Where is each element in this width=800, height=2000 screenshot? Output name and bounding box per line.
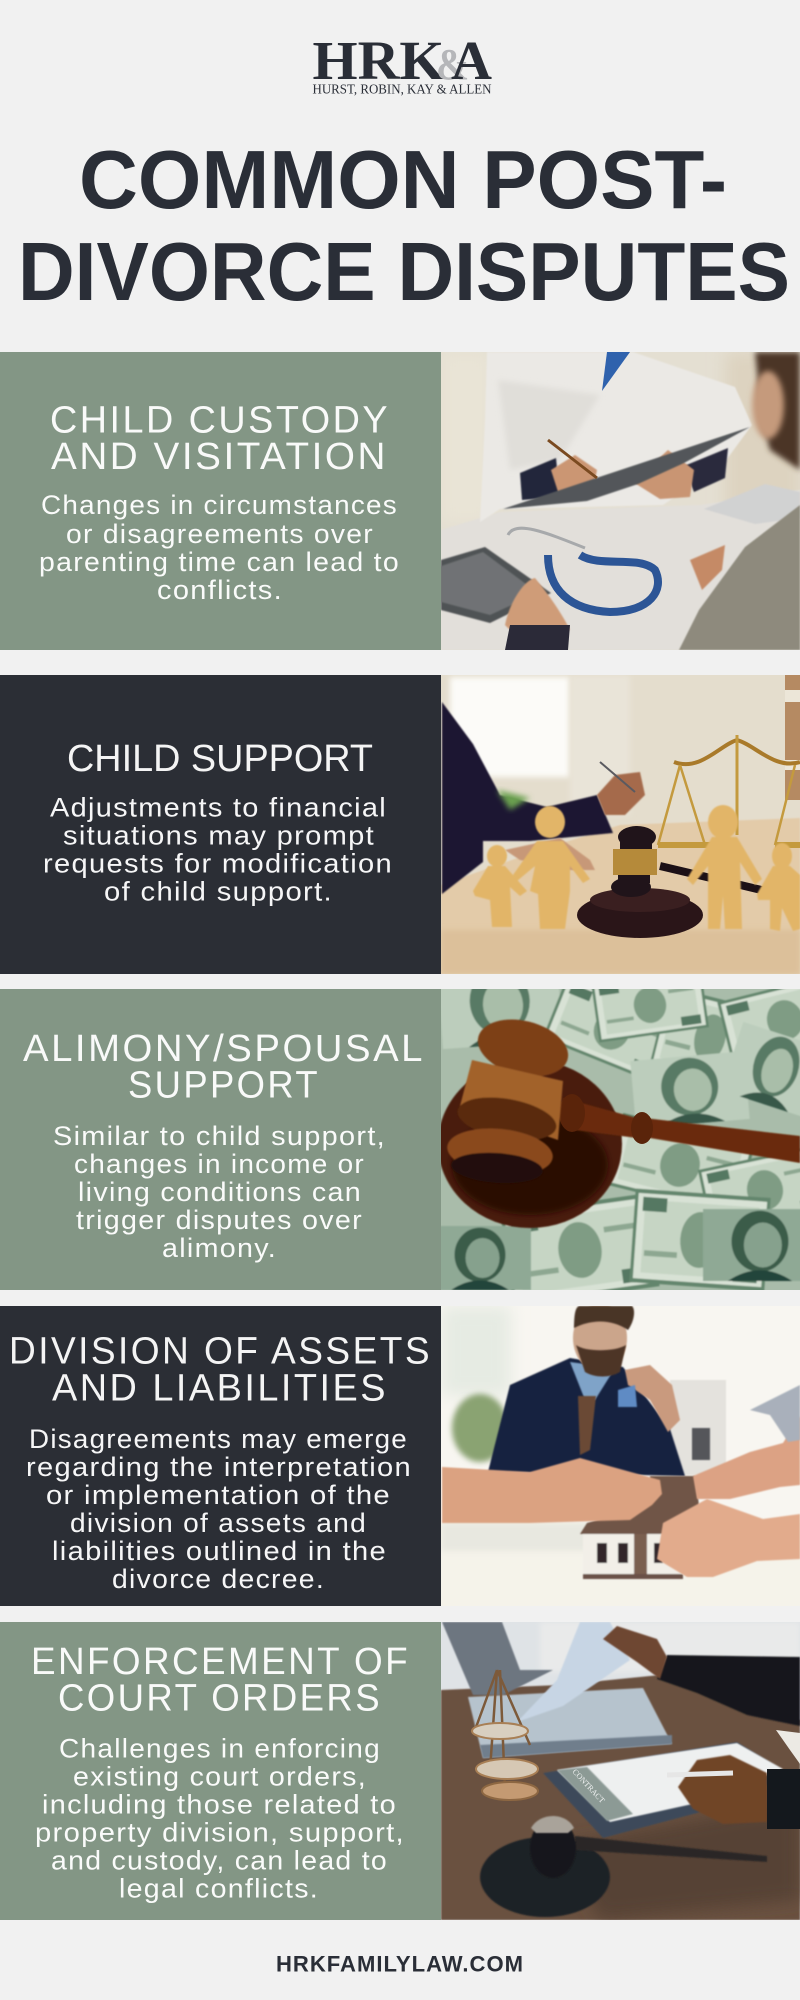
text: enforcement description: existing court orders, bbox=[73, 1762, 367, 1792]
clipboard and contract bbox=[543, 1742, 790, 1838]
text: child custody description: parenting time can lead to bbox=[39, 547, 400, 577]
panel: division of assets and liabilities bbox=[0, 1306, 441, 1606]
title: COMMON POST- bbox=[79, 133, 727, 226]
photo: doctor consultation bbox=[441, 352, 800, 650]
text: alimony description: trigger disputes over bbox=[76, 1205, 363, 1235]
text: division description: liabilities outlined in the bbox=[52, 1536, 387, 1566]
arm: left hand bbox=[442, 1458, 662, 1523]
text: division description: divorce decree. bbox=[112, 1564, 325, 1594]
text: child support description: requests for modification bbox=[43, 849, 393, 879]
gavel block bbox=[577, 900, 703, 938]
photo: family figures, gavel and scales bbox=[441, 675, 800, 974]
panel: enforcement of court orders bbox=[0, 1622, 441, 1920]
text: child support description bbox=[43, 793, 393, 907]
text: enforcement description: and custody, can lead to bbox=[51, 1846, 388, 1876]
scales bbox=[658, 735, 800, 845]
text: child custody description: conflicts. bbox=[157, 575, 283, 605]
logo: HRK&A: & bbox=[436, 40, 469, 89]
text: child support description: Adjustments to financial bbox=[50, 793, 387, 823]
text: division description: division of assets and bbox=[70, 1508, 367, 1538]
photo: contract, scales and gavel on desk bbox=[441, 1622, 800, 1920]
text: alimony description: Similar to child support, bbox=[53, 1121, 386, 1151]
panel: child custody and visitation bbox=[0, 352, 441, 650]
text: division description: regarding the interpretation bbox=[26, 1452, 412, 1482]
photo: gavel on dollar bills bbox=[441, 989, 800, 1290]
heading: child support: CHILD SUPPORT bbox=[67, 738, 373, 780]
logo: HRK&A bbox=[312, 30, 492, 96]
heading: division of assets: DIVISION OF ASSETS bbox=[9, 1330, 432, 1372]
heading: enforcement bbox=[31, 1641, 410, 1720]
heading: alimony bbox=[23, 1028, 425, 1107]
text: alimony description: changes in income or bbox=[74, 1149, 365, 1179]
text: enforcement description: property division, support, bbox=[35, 1818, 405, 1848]
gavel bbox=[480, 1837, 610, 1917]
text: child support description: of child support. bbox=[104, 877, 333, 907]
text: child custody description: or disagreements over bbox=[66, 519, 374, 549]
footer website: HRKFAMILYLAW.COM bbox=[276, 1952, 524, 1977]
photo: contract, scales and gavel on desk: CONTRACT bbox=[571, 1767, 607, 1805]
heading: child custody: CHILD CUSTODY bbox=[50, 400, 390, 442]
text: enforcement description: legal conflicts. bbox=[119, 1874, 319, 1904]
text: enforcement description: Challenges in enforcing bbox=[59, 1734, 381, 1764]
hand with pen bbox=[678, 1755, 767, 1824]
text: division description: Disagreements may emerge bbox=[29, 1424, 408, 1454]
heading: enforcement: COURT ORDERS bbox=[58, 1678, 382, 1720]
brass scales bbox=[472, 1670, 538, 1800]
wooden figures bbox=[473, 805, 800, 931]
text: child custody description: Changes in circumstances bbox=[41, 490, 398, 520]
heading: child custody: AND VISITATION bbox=[51, 436, 388, 478]
photo: hands on model house bbox=[441, 1304, 800, 1606]
text: division description bbox=[26, 1424, 412, 1594]
text: enforcement description bbox=[35, 1734, 405, 1904]
text: child support description: situations may prompt bbox=[63, 821, 375, 851]
heading: alimony: SUPPORT bbox=[128, 1065, 320, 1107]
house model bbox=[580, 1476, 703, 1579]
text: alimony description: alimony. bbox=[162, 1233, 277, 1263]
logo: HRK&A: HRK bbox=[312, 30, 445, 91]
logo: HRK&A: HURST, ROBIN, KAY & ALLEN bbox=[312, 81, 492, 96]
text: enforcement description: including those related to bbox=[42, 1790, 397, 1820]
panel: child support bbox=[0, 675, 441, 974]
text: alimony description bbox=[53, 1121, 386, 1263]
heading: division of assets: AND LIABILITIES bbox=[52, 1368, 388, 1410]
title bbox=[18, 133, 790, 318]
text: alimony description: living conditions can bbox=[78, 1177, 362, 1207]
arm: right hands bbox=[657, 1499, 800, 1577]
text: child custody description bbox=[39, 490, 400, 605]
heading: alimony: ALIMONY/SPOUSAL bbox=[23, 1028, 425, 1070]
text: division description: or implementation of the bbox=[46, 1480, 391, 1510]
heading: division of assets bbox=[9, 1330, 432, 1410]
logo: HRK&A: A bbox=[451, 30, 492, 91]
heading: enforcement: ENFORCEMENT OF bbox=[31, 1641, 410, 1683]
heading: child custody bbox=[50, 400, 390, 478]
panel: alimony/spousal support bbox=[0, 989, 441, 1290]
